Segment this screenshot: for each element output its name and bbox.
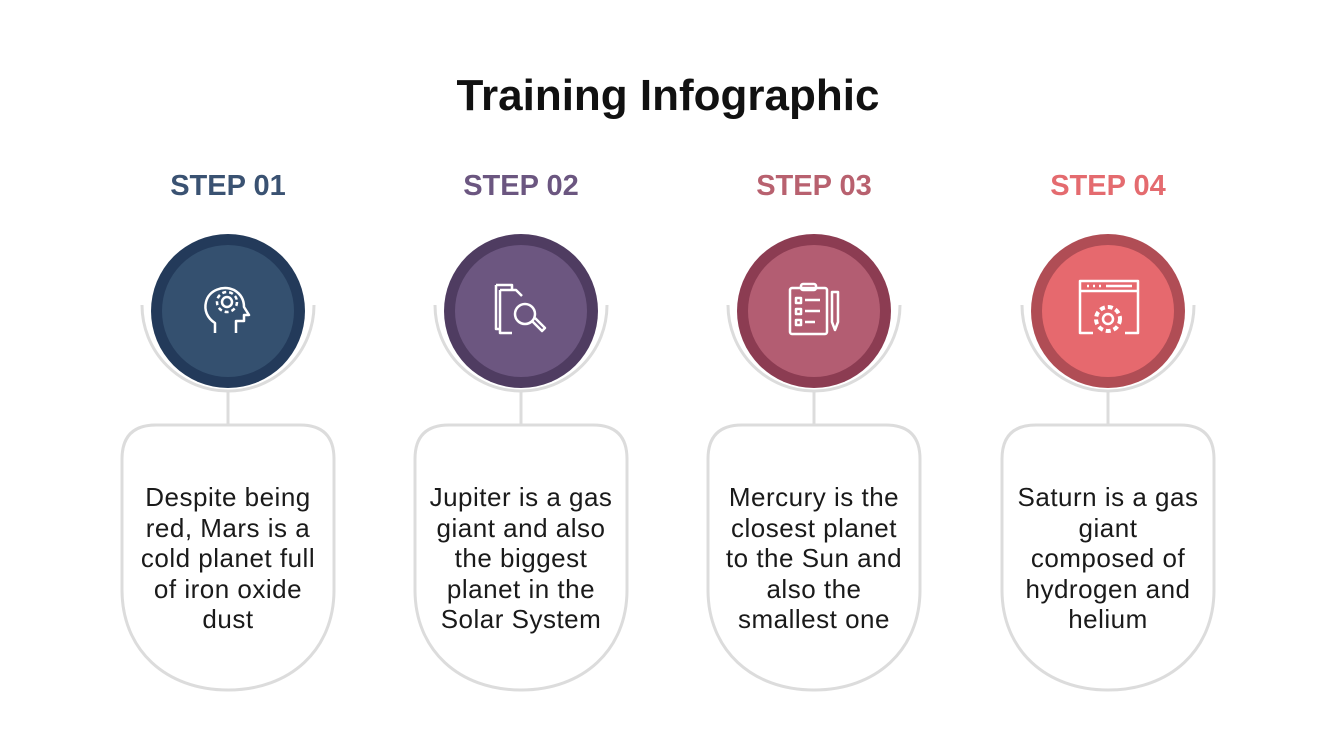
step label 02: STEP 02 — [463, 170, 579, 202]
icon circle 02 — [444, 234, 598, 388]
title: Training Infographic — [457, 71, 879, 120]
text card 02: Solar System — [441, 604, 601, 634]
text card 04: giant — [1079, 513, 1138, 543]
text card 01: red, Mars is a — [146, 513, 310, 543]
panel: step 02 — [415, 170, 627, 690]
panel: step 01 — [122, 170, 334, 690]
step label 03: STEP 03 — [756, 170, 872, 202]
text card 02: Jupiter is a gas — [430, 482, 612, 512]
text card 02 — [415, 425, 627, 690]
step label 04: STEP 04 — [1050, 170, 1166, 202]
icon circle 04 — [1031, 234, 1185, 388]
text card 01: of iron oxide — [154, 574, 302, 604]
text card 01: cold planet full — [141, 543, 315, 573]
text card 04: Saturn is a gas — [1018, 482, 1198, 512]
text card 04 — [1002, 425, 1214, 690]
panel: step 03 — [708, 170, 920, 690]
text card 03: closest planet — [731, 513, 897, 543]
text card 03: smallest one — [738, 604, 890, 634]
text card 03: also the — [766, 574, 862, 604]
text card 02: the biggest — [455, 543, 588, 573]
step label 01: STEP 01 — [170, 170, 286, 202]
text card 03 — [708, 425, 920, 690]
text card 03: to the Sun and — [726, 543, 902, 573]
text card 01 — [122, 425, 334, 690]
icon circle 03 — [737, 234, 891, 388]
text card 02: planet in the — [447, 574, 595, 604]
text card 02: giant and also — [437, 513, 605, 543]
text card 04: helium — [1068, 604, 1148, 634]
text card 04: composed of — [1031, 543, 1185, 573]
icon circle 01 — [151, 234, 305, 388]
text card 01: dust — [202, 604, 254, 634]
text card 01: Despite being — [145, 482, 311, 512]
panel: step 04 — [1002, 170, 1214, 690]
text card 03: Mercury is the — [729, 482, 899, 512]
text card 04: hydrogen and — [1025, 574, 1191, 604]
